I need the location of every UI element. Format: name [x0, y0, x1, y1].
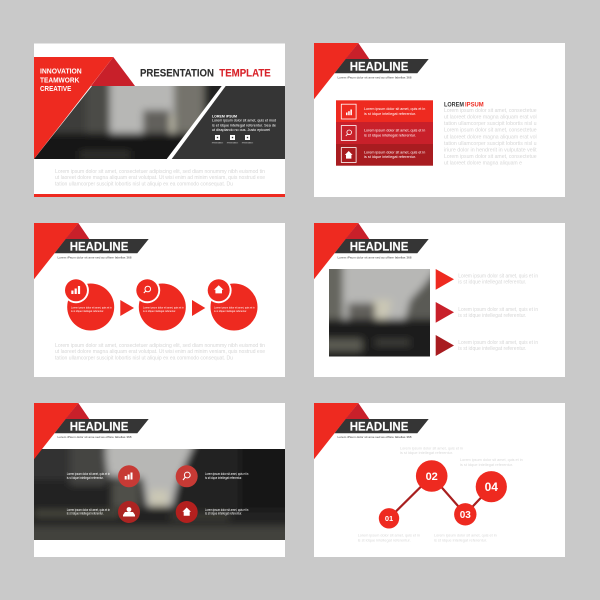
timeline text 04: Lorem ipsum dolor sit amet, quis et in	[460, 457, 523, 462]
timeline text 03: Lorem ipsum dolor sit amet, quis et in	[434, 533, 497, 538]
icon: bars	[341, 104, 356, 119]
headline banner: HEADLINE	[350, 60, 408, 74]
side paragraph: ut laoreet dolore magna aliquam erat vol	[444, 115, 537, 121]
arrow item 2: Lorem ipsum dolor sit amet, quis et in	[458, 307, 538, 313]
panel: cover slide	[10, 44, 285, 197]
cover title: PRESENTATION	[140, 68, 214, 80]
process paragraph: Lorem ipsum dolor sit amet, consectetuer adipiscing elit, sed diam nonummy nibh euismod tin	[55, 343, 265, 349]
panel: photo with icons slide	[34, 403, 285, 557]
node 03: 03	[460, 510, 471, 521]
photo caption text	[67, 472, 248, 516]
small cover icons: PRESENTATION	[212, 142, 224, 144]
photo: blurred city skyline	[34, 86, 222, 159]
infographic canvas	[34, 43, 565, 557]
dark panel text: is et idque intellegat referentur. Sea de	[212, 123, 276, 127]
process paragraph: tation ullamcorper suscipit lobortis nisl ut aliquip ex ea commodo consequat. Du	[55, 355, 233, 361]
headline banner: HEADLINE	[70, 419, 128, 433]
small cover icons	[212, 135, 254, 144]
arrow item 1: Lorem ipsum dolor sit amet, quis et in	[458, 274, 538, 280]
side paragraph: Lorem ipsum dolor sit amet, consectetue	[444, 108, 537, 114]
dark panel text: ut dissplando no ous. Justo epicurei	[212, 128, 270, 132]
headline banner	[34, 403, 149, 459]
lorem ipsum heading: IPSUM	[465, 101, 484, 108]
cover tagline	[40, 69, 82, 93]
circle step 1: Lorem ipsum dolor sit amet, quis et in	[71, 306, 112, 310]
circle step 3	[206, 277, 258, 330]
arrow item 2: is st idque intellegat referentur.	[458, 313, 527, 319]
photo: blurred street background	[34, 449, 285, 540]
headline banner	[314, 43, 429, 99]
cover title: TEMPLATE	[219, 68, 271, 80]
dark panel text: Lorem ipsum dolor sit amet, quis et mod	[212, 119, 276, 123]
panel: numbered timeline slide	[314, 403, 565, 557]
list text: is st idque intellegat referentur.	[364, 155, 416, 159]
icon badge: person	[118, 501, 140, 523]
red footer bar	[34, 194, 285, 197]
small cover icons: PRESENTATION	[242, 142, 254, 144]
photo caption text: Lorem ipsum dolor sit amet, quis et in	[67, 472, 110, 476]
circle step 3: Lorem ipsum dolor sit amet, quis et in	[214, 306, 255, 310]
cover title	[140, 68, 271, 80]
node 04: 04	[485, 480, 498, 494]
headline banner	[314, 403, 429, 459]
dark panel text: LOREM IPSUM	[212, 115, 237, 119]
lorem ipsum heading	[444, 101, 484, 108]
photo caption text: is st idque intellegat referentur.	[67, 512, 104, 516]
photo caption text: is st idque intellegat referentur.	[205, 512, 242, 516]
side paragraph: tation ullamcorper suscipit lobortis nisl u	[444, 141, 537, 147]
photo caption text: Lorem ipsum dolor sit amet, quis et in	[205, 508, 248, 512]
circle step 2: Lorem ipsum dolor sit amet, quis et in	[143, 306, 184, 310]
cover paragraph: tation ullamcorper suscipit lobortis nisl ut aliquip ex ea commodo consequat. Du	[55, 182, 233, 188]
arrow item 1: is st idque intellegat referentur.	[458, 280, 527, 286]
headline banner: Lorem iPsum dolor sit ame sed ao offisre fabellas 368	[338, 435, 412, 439]
panel: circle process slide	[34, 223, 285, 377]
arrow item 1	[436, 269, 538, 290]
circle step 2: is st idque intellegat referentur.	[143, 309, 176, 313]
side paragraph: Lorem ipsum dolor sit amet, consectetue	[444, 154, 537, 160]
list text	[364, 107, 425, 159]
headline banner: Lorem iPsum dolor sit ame sed ao offisre fabellas 368	[58, 435, 132, 439]
node 01	[379, 508, 399, 528]
headline banner	[34, 223, 149, 279]
side paragraph: ut laoreet dolore magna aliquam e	[444, 160, 522, 166]
side paragraph: tation ullamcorper suscipit lobortis nisl u	[444, 121, 537, 127]
arrow	[192, 300, 205, 316]
small cover icons: PRESENTATION	[227, 142, 239, 144]
headline banner: HEADLINE	[70, 240, 128, 254]
arrow item 3: is st idque intellegat referentur.	[458, 346, 527, 352]
timeline text 03	[434, 533, 497, 542]
photo caption text: is st idque intellegat referentur.	[67, 476, 104, 480]
process paragraph	[55, 343, 265, 361]
cover paragraph	[55, 169, 265, 188]
timeline text 01: is st idque intellegat referentur.	[358, 537, 411, 542]
side paragraph: Lorem ipsum dolor sit amet, consectetue	[444, 128, 537, 134]
headline banner: HEADLINE	[350, 419, 408, 433]
icon badge: bars	[118, 465, 140, 487]
lorem ipsum heading: LOREM	[444, 101, 464, 108]
timeline text 03: is st idque intellegat referentur.	[434, 537, 487, 542]
side paragraph: ut laoreet dolore magna aliquam erat vol	[444, 134, 537, 140]
arrow item 2	[436, 302, 538, 323]
circle step 1: is st idque intellegat referentur.	[71, 309, 104, 313]
node 03	[454, 503, 476, 526]
node 02	[416, 460, 448, 492]
headline banner: Lorem iPsum dolor sit ame sed ao offisre fabellas 368	[338, 76, 412, 80]
timeline text 01	[358, 533, 420, 542]
headline banner: HEADLINE	[350, 240, 408, 254]
timeline text 02	[400, 445, 463, 455]
connector line	[389, 476, 491, 518]
bright red triangle	[34, 57, 113, 159]
arrow item 3: Lorem ipsum dolor sit amet, quis et in	[458, 340, 538, 346]
list text: Lorem ipsum dolor sit amet, quis et in	[364, 107, 425, 111]
circle step 3: is st idque intellegat referentur.	[214, 309, 247, 313]
cover tagline: TEAMWORK	[40, 77, 79, 84]
icon badge: home	[176, 501, 198, 523]
photo caption text: Lorem ipsum dolor sit amet, quis et in	[67, 508, 110, 512]
cover tagline: CREATIVE	[40, 86, 72, 93]
list text: is st idque intellegat referentur.	[364, 112, 416, 116]
dark red triangle	[91, 57, 135, 86]
headline banner: Lorem iPsum dolor sit ame sed ao offisre fabellas 368	[338, 256, 412, 260]
circle step 2	[134, 277, 186, 330]
list text: Lorem ipsum dolor sit amet, quis et in	[364, 129, 425, 133]
arrow item 3	[436, 335, 538, 356]
circle step 1	[63, 277, 114, 330]
dark text panel	[172, 86, 285, 159]
icon: magnifier	[341, 126, 356, 140]
process paragraph: ut laoreet dolore magna aliquam erat volutpat. Ut wisi enim ad minim veniam, quis nostrud exe	[55, 349, 265, 355]
node 04	[476, 471, 507, 502]
photo caption text: is st idque intellegat referentur.	[205, 476, 242, 480]
timeline text 01: Lorem ipsum dolor sit amet, quis et in	[358, 533, 420, 538]
icon: home	[341, 148, 356, 162]
red list box	[336, 100, 433, 166]
side paragraph	[444, 108, 537, 166]
cover paragraph: ut laoreet dolore magna aliquam erat volutpat. Ut wisi enim ad minim veniam, quis nostrud exe	[55, 175, 265, 181]
headline banner	[314, 223, 429, 279]
photo caption text: Lorem ipsum dolor sit amet, quis et in	[205, 472, 248, 476]
cover paragraph: Lorem ipsum dolor sit amet, consectetuer adipiscing elit, sed diam nonummy nibh euismod tin	[55, 169, 265, 175]
dark panel text	[212, 115, 276, 132]
icon badge: magnifier	[176, 465, 198, 487]
panel: icon list slide	[314, 43, 565, 197]
list text: is st idque intellegat referentur.	[364, 133, 416, 137]
headline banner: Lorem iPsum dolor sit ame sed ao offisre fabellas 368	[58, 256, 132, 260]
side paragraph: iriure dolor in hendrerit in vulputate velit	[444, 148, 537, 154]
timeline text 02: is st idque intellegat referentur.	[400, 450, 453, 455]
cover tagline: INNOVATION	[40, 69, 82, 76]
photo: blurred city street	[329, 269, 430, 356]
node 01: 01	[385, 514, 393, 523]
panel: photo and arrows slide	[310, 223, 565, 377]
timeline text 04: is st idque intellegat referentur.	[460, 462, 513, 467]
timeline text 02: Lorem ipsum dolor sit amet, quis et in	[400, 445, 463, 450]
arrow	[120, 300, 134, 316]
timeline text 04	[460, 457, 523, 467]
list text: Lorem ipsum dolor sit amet, quis et in	[364, 150, 425, 154]
node 02: 02	[426, 471, 438, 483]
